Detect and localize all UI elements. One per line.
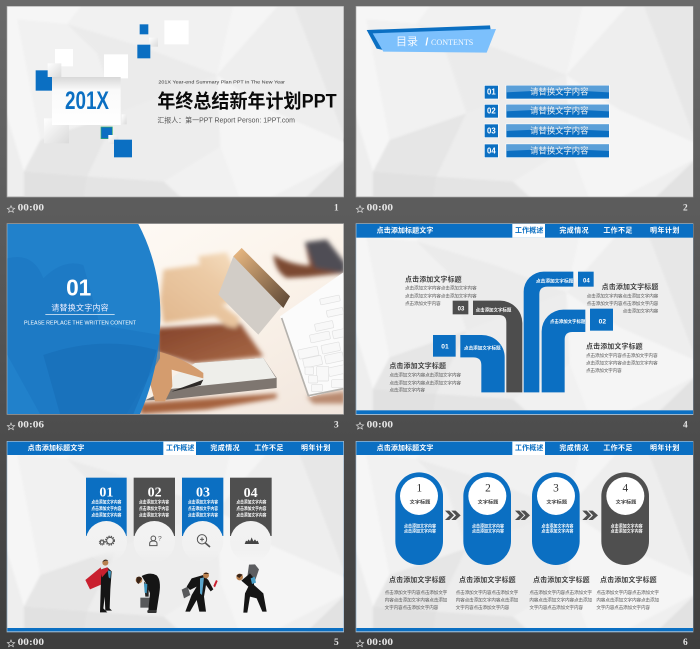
text block: lower right: 点击添加文字内容	[586, 367, 622, 374]
arrow 1	[445, 511, 461, 520]
card 04: 点击添加文字内容	[236, 498, 267, 505]
slide 5: four cards with figures	[4, 439, 347, 648]
card 03: 点击添加文字内容	[188, 498, 218, 505]
blue semicircle panel: 01	[66, 275, 91, 301]
footer 1	[7, 203, 339, 213]
arrow 2	[515, 511, 530, 520]
header bar 4: 工作不足	[603, 225, 632, 234]
row 01	[484, 85, 610, 99]
step 04: 点击添加文字标题	[536, 278, 574, 285]
pill 3: 点击添加文字内容	[541, 522, 574, 529]
slide 3: section photo	[7, 223, 347, 431]
pill 3: 点击添加文字内容	[541, 528, 574, 535]
bottom bar 4	[356, 410, 693, 414]
footer 1: 1	[334, 203, 339, 213]
footer 6: 6	[683, 638, 688, 648]
row 01: 请替换文字内容	[530, 86, 589, 97]
text block: top left	[405, 274, 477, 307]
card 02: 02	[148, 485, 162, 500]
step 01: 01	[441, 343, 449, 350]
caption 2: 点击添加文字内容点击添加文字	[456, 589, 519, 596]
row 02: 02	[487, 106, 496, 116]
slide 6: process pills	[353, 438, 696, 648]
text block: top left: 点击添加文字内容	[405, 300, 441, 307]
upper hand	[158, 250, 241, 331]
figure: superhero	[85, 560, 112, 612]
pill 3	[532, 472, 580, 565]
icon: person with question mark: ?	[158, 536, 162, 543]
caption 3: 点击添加文字内容点击添加文字	[529, 589, 592, 596]
arrow 3	[582, 511, 598, 520]
pill 1: 1	[416, 482, 422, 494]
contents list	[484, 85, 610, 158]
header bar 4	[356, 224, 693, 238]
text block: lower left: 点击添加文字标题	[389, 361, 446, 370]
text block: top right	[587, 282, 659, 315]
pill 2: 点击添加文字内容	[472, 522, 504, 529]
card 02: 点击添加文字内容	[139, 498, 169, 505]
footer 3	[7, 421, 339, 431]
figure: man with shield	[236, 564, 267, 613]
step 02	[542, 309, 613, 392]
caption 2: 点击添加文字标题	[459, 575, 516, 584]
caption 4: 点击添加文字标题	[600, 575, 657, 584]
slide 1: cover	[4, 4, 347, 213]
text block: lower left: 点击添加文字内容点击添加文字内容	[389, 379, 461, 386]
step 02: 点击添加文字标题	[550, 318, 586, 325]
pill 2: 2	[485, 482, 491, 494]
header bar 6: 完成情况	[559, 443, 589, 452]
footer 6	[356, 638, 688, 648]
row 03	[484, 124, 610, 138]
header bar 5: 明年计划	[301, 443, 330, 452]
footer 3: 3	[334, 421, 339, 431]
row 03: 03	[487, 125, 496, 135]
pill 2: 文字标题	[478, 498, 499, 505]
header bar 6: 明年计划	[650, 443, 679, 452]
text block: top left: 点击添加文字内容点击添加文字内容	[405, 285, 477, 292]
pill 1	[395, 472, 443, 565]
caption 4: 文字内容点击添加文字内容	[596, 604, 650, 611]
credit card	[218, 248, 290, 335]
caption 1: 文字内容点击添加文字内容	[385, 604, 439, 611]
row 04: 请替换文字内容	[530, 144, 589, 155]
cover title block: 201X Year-end Summary Plan PPT in The New Year	[158, 79, 286, 84]
header bar 4: 完成情况	[559, 225, 589, 234]
caption 3: 文字内容点击添加文字内容	[529, 604, 583, 611]
header bar 5: 工作不足	[254, 443, 283, 452]
cover title block	[157, 79, 337, 124]
card 01: 点击添加文字内容	[91, 505, 122, 512]
text block: top left: 点击添加文字内容点击添加文字内容	[405, 292, 477, 299]
step 03: 03	[458, 306, 465, 312]
header bar 6: 工作不足	[603, 443, 632, 452]
pill 2: 点击添加文字内容	[472, 528, 504, 535]
icon: gears	[99, 536, 114, 545]
slide 4: staircase diagram	[353, 221, 696, 431]
caption 4	[596, 575, 659, 611]
card 04: 04	[244, 486, 258, 501]
card 01	[86, 478, 127, 562]
pill 1: 点击添加文字内容	[404, 528, 436, 535]
footer 1: 00:00	[18, 203, 44, 213]
footer 4: 4	[683, 421, 688, 431]
footer 4: 00:00	[367, 421, 393, 431]
caption 4: 内容点击添加文字内容点击添加	[596, 596, 659, 603]
caption 1	[385, 575, 448, 611]
pill 4	[601, 472, 649, 565]
text block: lower right	[586, 341, 658, 374]
caption 3	[529, 575, 592, 611]
row 02: 请替换文字内容	[530, 105, 589, 116]
footer 5: 5	[334, 638, 339, 648]
text block: top right: 点击添加文字内容点击添加文字内容	[587, 300, 659, 307]
row 02	[484, 104, 610, 118]
bottom bar 5	[7, 628, 343, 631]
footer 5	[7, 638, 339, 648]
header bar 6	[356, 442, 693, 455]
201X card	[52, 77, 121, 125]
caption 3: 内容点击添加文字内容点击添加	[529, 596, 592, 603]
text block: top left: 点击添加文字标题	[405, 274, 462, 283]
contents banner	[367, 25, 496, 53]
card 03: 点击添加文字内容	[188, 511, 218, 518]
header bar 4: 明年计划	[650, 225, 679, 234]
pill 3: 3	[553, 482, 559, 494]
caption 2: 文字内容点击添加文字内容	[456, 604, 510, 611]
text block: top right: 点击添加文字内容	[623, 308, 659, 315]
slide 2: contents	[353, 3, 696, 213]
pill 4: 4	[622, 482, 628, 494]
card 02: 点击添加文字内容	[139, 505, 169, 512]
cover title block: 汇报人：第一PPT Report Person: 1PPT.com	[157, 115, 295, 124]
header bar 5	[7, 442, 343, 455]
header bar 6: 点击添加标题文字	[377, 443, 433, 452]
row 04	[484, 144, 610, 158]
phone	[145, 351, 277, 401]
text block: lower left: 点击添加文字内容点击添加文字内容	[389, 372, 461, 379]
header bar 5: 完成情况	[210, 443, 240, 452]
pill 1: 文字标题	[410, 498, 431, 505]
footer 4	[356, 421, 688, 431]
cover title block: 年终总结新年计划PPT	[157, 89, 337, 112]
text block: top right: 点击添加文字内容点击添加文字内容	[587, 293, 659, 300]
header bar 5: 点击添加标题文字	[28, 443, 84, 452]
figure: bowing man	[136, 574, 160, 613]
caption 2: 内容点击添加文字内容点击添加	[456, 596, 519, 603]
footer 6: 00:00	[367, 638, 393, 648]
step 03	[453, 301, 522, 392]
pill 4: 点击添加文字内容	[611, 522, 643, 529]
step 01	[433, 335, 505, 392]
step 02: 02	[599, 318, 606, 325]
text block: lower right: 点击添加文字内容点击添加文字内容	[586, 360, 658, 367]
card 02	[134, 478, 175, 562]
blue semicircle panel	[7, 224, 160, 414]
dark object top right	[273, 240, 345, 278]
bottom bar 6	[356, 628, 693, 631]
201X card: 201X	[65, 88, 109, 115]
footer 2: 00:00	[367, 203, 393, 213]
card 02: 点击添加文字内容	[139, 511, 169, 518]
card 04	[230, 478, 272, 562]
step 04: 04	[583, 279, 590, 285]
row 04: 04	[487, 145, 496, 155]
pill 4: 点击添加文字内容	[611, 528, 643, 535]
footer 5: 00:00	[18, 638, 44, 648]
pill 2	[463, 472, 511, 565]
header bar 5: 工作概述	[166, 443, 194, 452]
card 03: 03	[196, 485, 210, 500]
text block: lower left	[389, 361, 461, 394]
card 01: 点击添加文字内容	[91, 498, 122, 505]
card 03	[182, 478, 223, 562]
caption 1: 内容点击添加文字内容点击添加	[385, 596, 448, 603]
icon: crowd	[245, 537, 259, 544]
text block: top right: 点击添加文字标题	[602, 282, 658, 291]
footer 3: 00:06	[18, 421, 44, 431]
header bar 4: 点击添加标题文字	[377, 225, 433, 234]
card 04: 点击添加文字内容	[236, 505, 267, 512]
caption 2	[456, 575, 519, 611]
header bar 6: 工作概述	[515, 443, 543, 452]
pill 3: 文字标题	[546, 498, 567, 505]
card 01: 点击添加文字内容	[91, 511, 122, 518]
row 01: 01	[487, 87, 496, 97]
card 01: 01	[99, 485, 113, 500]
caption 3: 点击添加文字标题	[533, 575, 590, 584]
blue semicircle panel: PLEASE REPLACE THE WRITTEN CONTENT	[24, 320, 137, 326]
footer 2	[356, 203, 688, 213]
step 03: 点击添加文字标题	[476, 306, 512, 313]
card 04: 点击添加文字内容	[236, 511, 267, 518]
contents banner: /	[425, 37, 428, 49]
text block: lower left: 点击添加文字内容	[389, 387, 425, 394]
pill 4: 文字标题	[616, 498, 637, 505]
decorative squares	[36, 20, 189, 157]
keyboard	[280, 272, 347, 397]
caption 1: 点击添加文字内容点击添加文字	[385, 589, 448, 596]
blue semicircle panel: 请替换文字内容	[51, 302, 109, 312]
footer 2: 2	[683, 203, 688, 213]
step 04	[524, 272, 594, 392]
card 03: 点击添加文字内容	[188, 505, 218, 512]
row 03: 请替换文字内容	[530, 124, 589, 135]
caption 4: 点击添加文字内容点击添加文字	[596, 589, 659, 596]
desk surfaces	[157, 323, 263, 364]
icon: magnifier	[197, 535, 210, 547]
desk photo	[138, 224, 344, 414]
header bar 4: 工作概述	[515, 225, 543, 234]
step 01: 点击添加文字标题	[464, 345, 501, 352]
caption 1: 点击添加文字标题	[389, 575, 446, 584]
pill 1: 点击添加文字内容	[404, 522, 436, 529]
text block: lower right: 点击添加文字标题	[586, 341, 643, 350]
figure: running man with briefcase	[182, 572, 218, 612]
text block: lower right: 点击添加文字内容点击添加文字内容	[586, 352, 658, 359]
contents banner: CONTENTS	[431, 38, 474, 47]
contents banner: 目录	[396, 35, 418, 48]
